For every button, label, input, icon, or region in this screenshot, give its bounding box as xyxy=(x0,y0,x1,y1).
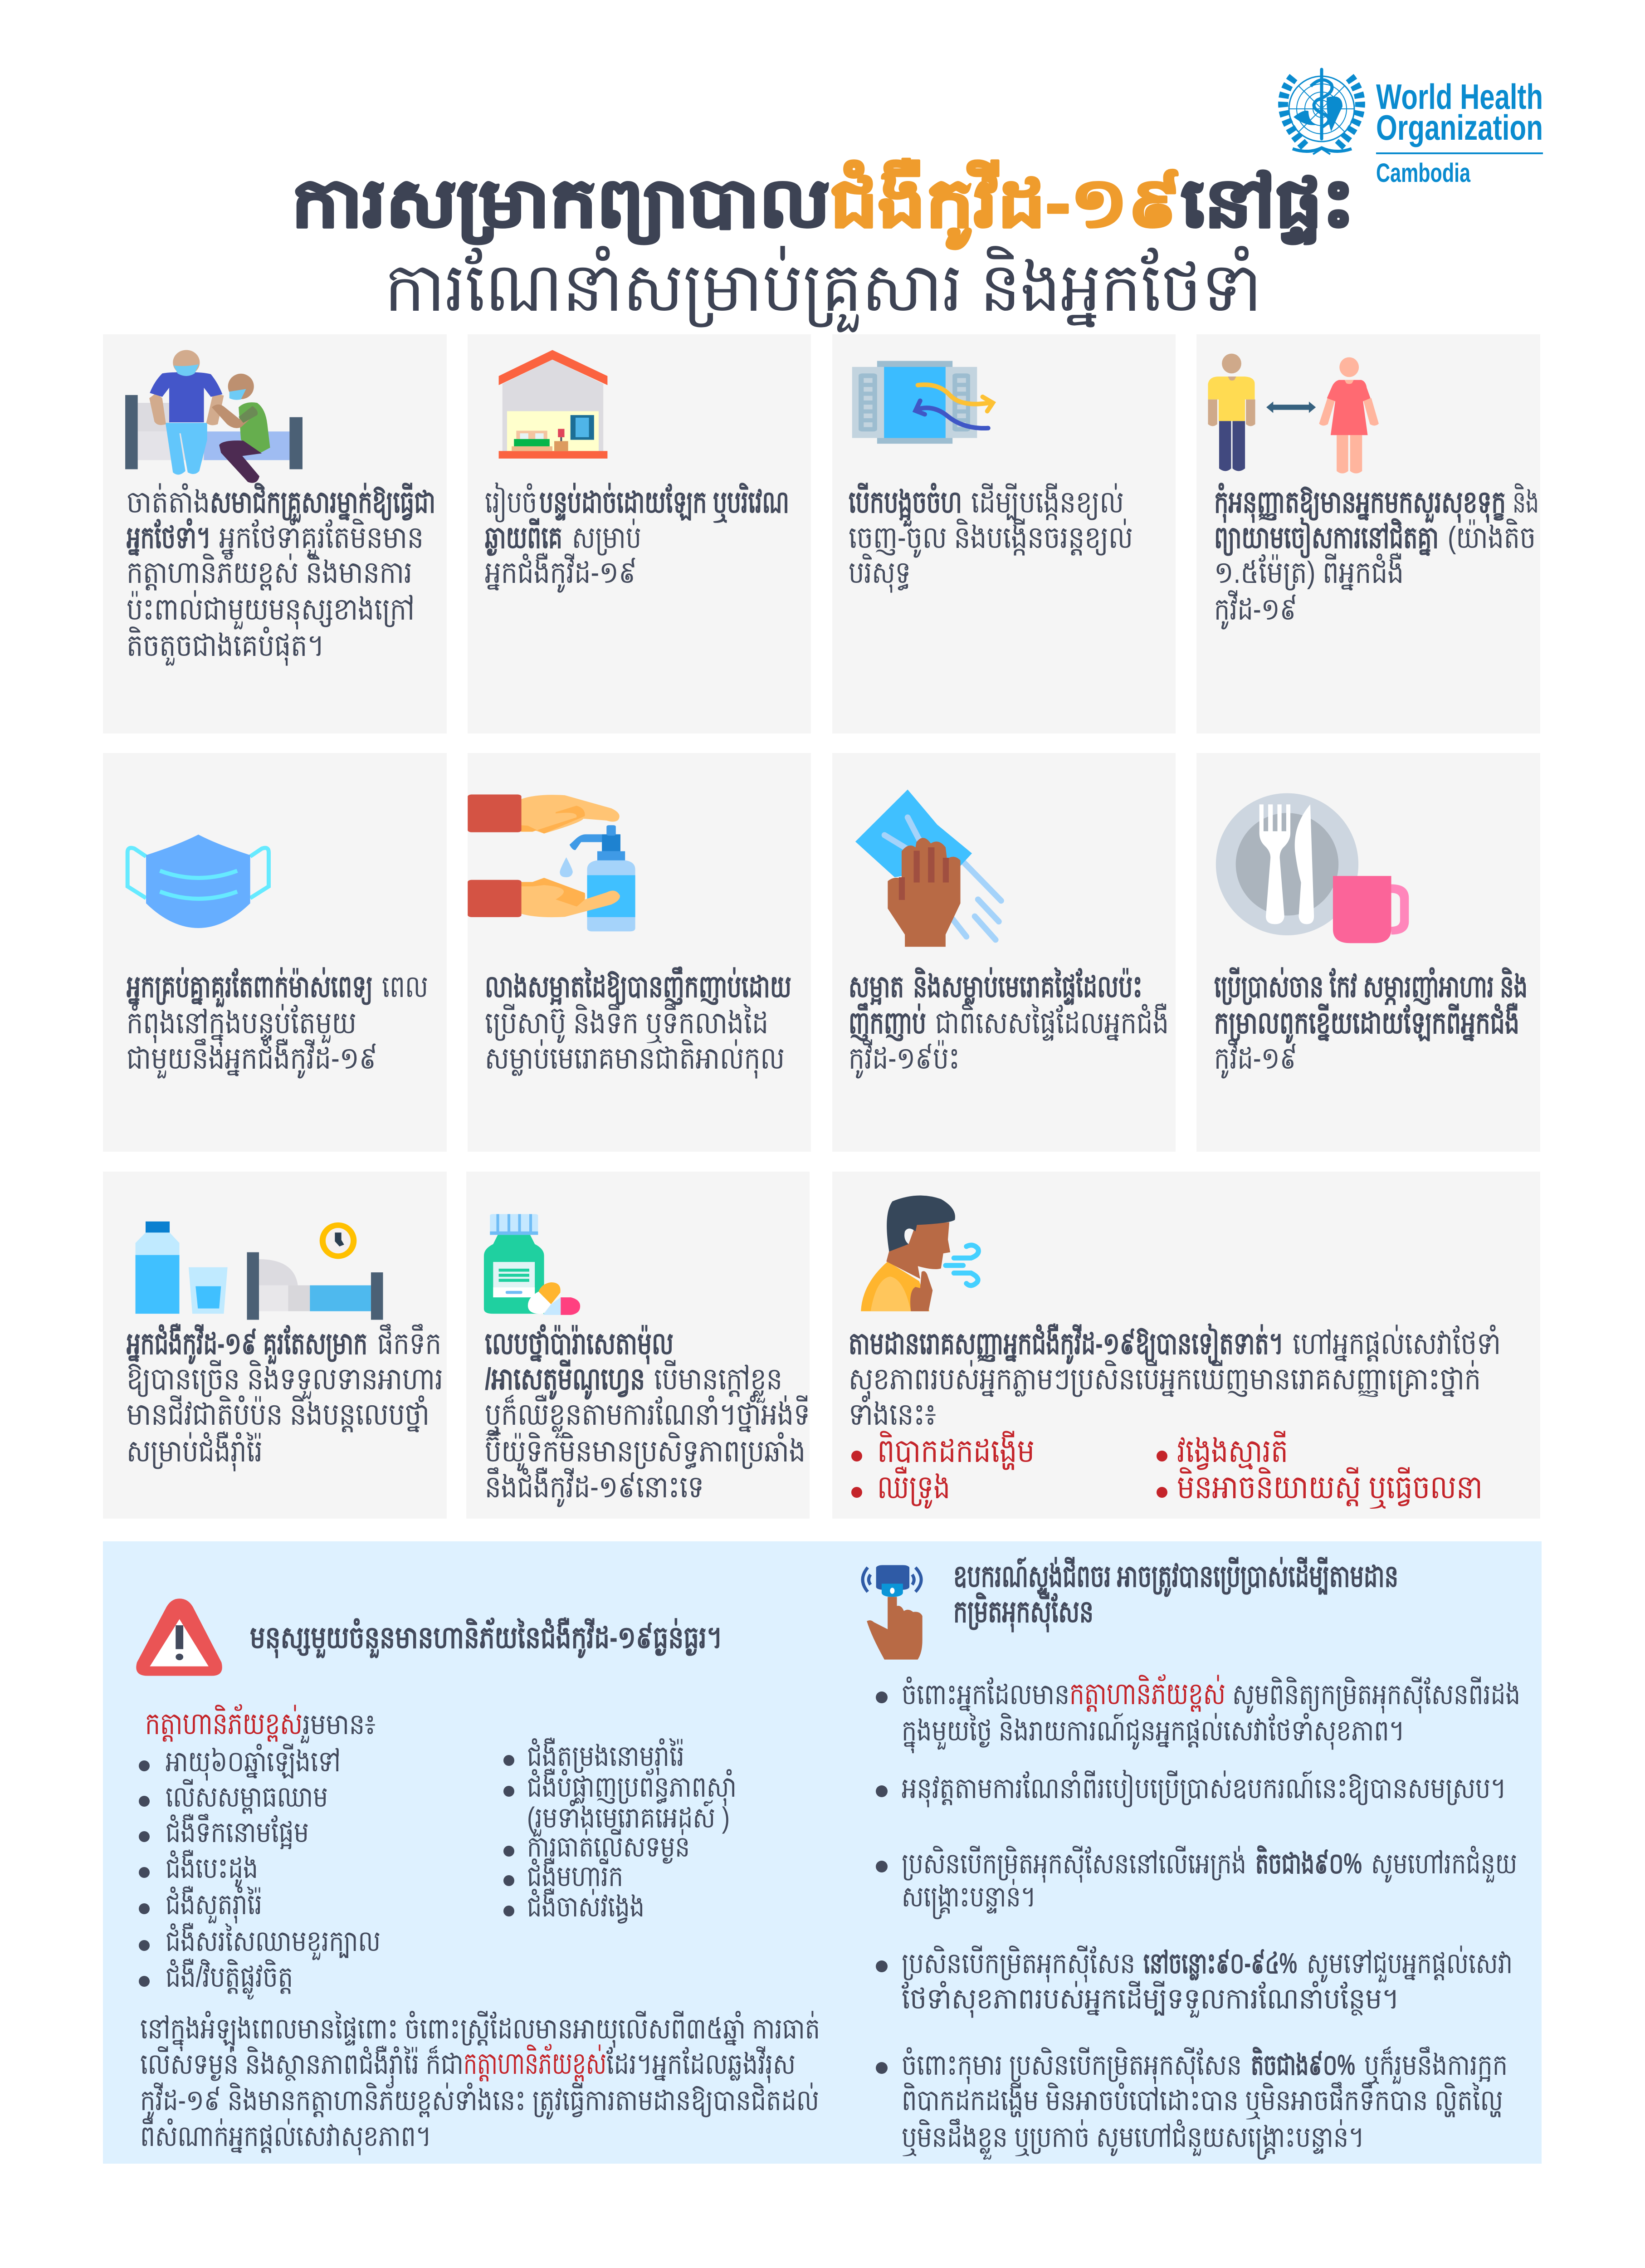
text: caregiver: ចាត់តាំង xyxy=(127,483,210,519)
text: pregnancy note: ពីសំណាក់អ្នកផ្តល់សេវាសុខភាព។ xyxy=(140,2118,431,2156)
text: distancing: និង xyxy=(1513,483,1539,519)
text: masks: កំពុងនៅក្នុងបន្ទប់តែមួយ xyxy=(127,1004,356,1047)
subtitle: ការណែនាំសម្រាប់គ្រួសារ និងអ្នកថែទាំ xyxy=(385,246,1262,332)
panel: ventilation xyxy=(832,334,1176,733)
text: distancing: ព្យាយាមចៀសការនៅជិតគ្នា xyxy=(1214,517,1439,558)
icon: warning triangle xyxy=(136,1598,222,1676)
list: risk factors right: ជំងឺបំផ្លាញប្រព័ន្ធភាពស៊ាំ xyxy=(527,1768,737,1806)
icon: plate, cutlery and mug xyxy=(1216,793,1409,943)
text: distancing: កូវីដ-១៩ xyxy=(1214,590,1297,630)
icon: person coughing xyxy=(861,1196,978,1311)
logo text: Cambodia: Cambodia xyxy=(1376,158,1471,188)
list: oximeter advice: ចំពោះកុមារ ប្រសិនបើកម្រិតអុកស៊ីសែន xyxy=(902,2047,1242,2084)
list: oximeter advice: ពិបាកដកដង្ហើម មិនអាចបំបៅដោះបាន ឬមិនអាចផឹកទឹកបាន ល្ហិតល្ហៃ xyxy=(902,2082,1503,2120)
list: oximeter advice xyxy=(876,1674,1520,2160)
text: cleaning surfaces: កូវីដ-១៩ប៉ះ xyxy=(849,1039,960,1079)
text: hand washing: សម្លាប់មេរោគមានជាតិអាល់កុល xyxy=(485,1039,785,1079)
list: risk factors left xyxy=(139,1744,381,2000)
text: cleaning surfaces: និងសម្លាប់មេរោគផ្ទៃដែលប៉ះ xyxy=(913,967,1142,1005)
text: rest and fluids: ឱ្យបានច្រើន និងទទួលទានអាហារ xyxy=(127,1360,443,1399)
list: oximeter advice: ប្រសិនបើកម្រិតអុកស៊ីសែន xyxy=(902,1945,1135,1983)
text: medicine: ឬក៏ឈឺខ្លួនតាមការណែនាំ។ថ្នាំអង់ទី xyxy=(485,1394,810,1438)
panel: utensils xyxy=(1196,753,1540,1152)
text: distancing xyxy=(1214,483,1539,630)
text: ventilation: បរិសុទ្ធ xyxy=(849,553,911,593)
list: risk factors left: ជំងឺទឹកនោមផ្អែម xyxy=(166,1813,309,1849)
text: cleaning surfaces: ញឹកញាប់ xyxy=(849,1002,926,1041)
text: separate room: រៀបចំ xyxy=(485,482,537,523)
list: oximeter advice: សូមហៅរកជំនួយ xyxy=(1371,1846,1517,1883)
list: danger signs xyxy=(851,1431,1483,1509)
icon: open window with airflow xyxy=(852,361,993,444)
list: oximeter advice: តិចជាង៩០% xyxy=(1251,2047,1355,2081)
list: danger signs: វង្វេងស្មារតី xyxy=(1177,1431,1288,1470)
text: distancing: ១.៥ម៉ែត្រ) ពីអ្នកជំងឺ xyxy=(1214,552,1404,591)
title: ជំងឺកូវីដ-១៩ xyxy=(830,159,1181,249)
text: pregnancy note: នៅក្នុងអំឡុងពេលមានផ្ទៃពោះ ចំពោះស្ត្រីដែលមានអាយុលើសពី៣៥ឆ្នាំ ការធាត់ xyxy=(140,2011,820,2052)
text: medicine xyxy=(485,1324,810,1507)
text: ventilation: ដើម្បីបង្កើនខ្យល់ xyxy=(971,483,1124,520)
list: risk factors right: ជំងឺមហារីក xyxy=(527,1857,623,1892)
text: pregnancy note: កត្តាហានិភ័យខ្ពស់ xyxy=(464,2043,606,2082)
text: ventilation: ចេញ-ចូល និងបង្កើនចរន្តខ្យល់ xyxy=(849,518,1133,558)
list: risk factors left: ជំងឺសួតរ៉ាំរ៉ៃ xyxy=(166,1886,262,1924)
text: symptoms intro xyxy=(849,1323,1501,1432)
list: danger signs: មិនអាចនិយាយស្តី ឬធ្វើចលនា xyxy=(1177,1467,1483,1509)
icon: hands and sanitizer bottle xyxy=(468,795,635,931)
text: masks xyxy=(127,967,428,1079)
list: danger signs: ឈឺទ្រូង xyxy=(877,1466,950,1509)
icon: WHO emblem xyxy=(1283,69,1360,154)
text: symptoms intro: តាមដានរោគសញ្ញាអ្នកជំងឺកូវីដ-១៩ឱ្យបានទៀតទាត់។ xyxy=(849,1323,1284,1364)
text: separate room xyxy=(485,482,789,593)
text: distancing: (យ៉ាងតិច xyxy=(1448,518,1536,555)
text: caregiver: ប៉ះពាល់ជាមួយមនុស្សខាងក្រៅ xyxy=(127,590,415,630)
list: risk factors right: (រួមទាំងមេរោគអេដស៍ ) xyxy=(527,1800,730,1837)
icon: medical mask xyxy=(127,835,268,928)
list: risk factors left: លើសសម្ពាធឈាម xyxy=(166,1779,328,1814)
text: high risk factors include: រួមមាន៖ xyxy=(301,1708,376,1744)
text: utensils: កូវីដ-១៩ xyxy=(1214,1039,1297,1079)
list: risk factors left: ជំងឺសរសៃឈាមខួរក្បាល xyxy=(166,1922,381,1960)
panel: hand washing xyxy=(468,753,811,1152)
text: separate room: សម្រាប់ xyxy=(572,518,641,556)
text: medicine: លេបថ្នាំប៉ារ៉ាសេតាម៉ុល xyxy=(485,1324,674,1364)
list: risk factors left: អាយុ៦០ឆ្នាំឡើងទៅ xyxy=(166,1744,341,1781)
list: oximeter advice: សង្គ្រោះបន្ទាន់។ xyxy=(902,1879,1036,1920)
list: oximeter advice: ឬមិនដឹងខ្លួន ឬប្រកាច់ សូមហៅជំនួយសង្គ្រោះបន្ទាន់។ xyxy=(902,2118,1364,2160)
text: caregiver: អ្នកថែទាំ។ xyxy=(127,518,211,556)
panel: distancing xyxy=(1196,334,1540,733)
text: medicine: បើមានក្តៅខ្លួន xyxy=(654,1360,782,1403)
list: oximeter advice: ថែទាំសុខភាពរបស់អ្នកដើម្បីទទួលការណែនាំបន្ថែម។ xyxy=(902,1981,1399,2018)
text: masks: ពេល xyxy=(382,969,428,1004)
text: symptoms intro: សុខភាពរបស់អ្នកភ្លាមៗប្រសិនបើអ្នកឃើញមានរោគសញ្ញាគ្រោះថ្នាក់ xyxy=(849,1360,1481,1399)
text: pregnancy note: លើសទម្ងន់ និងស្ថានភាពជំងឺរ៉ាំរ៉ៃ ក៏ជា xyxy=(140,2045,464,2083)
list: oximeter advice: នៅចន្លោះ៩០-៩៤% xyxy=(1143,1947,1297,1980)
text: separate room: បន្ទប់ដាច់ដោយឡែក ឬបរិវេណ xyxy=(539,483,789,523)
text: symptoms intro: ហៅអ្នកផ្តល់សេវាថែទាំ xyxy=(1293,1325,1501,1362)
text: cleaning surfaces: ជាពិសេសផ្ទៃដែលអ្នកជំងឺ xyxy=(935,1003,1169,1041)
logo: World Health Organization Cambodia xyxy=(1283,69,1543,188)
text: caregiver: អ្នកថែទាំគួរតែមិនមាន xyxy=(219,518,424,558)
list: oximeter advice: សូមពិនិត្យកម្រិតអុកស៊ីសែនពីរដង xyxy=(1232,1677,1520,1714)
panel: risk factors and pulse oximeter xyxy=(103,1541,1542,2164)
text: hand washing: ប្រើសាប៊ូ និងទឹក ឬទឹកលាងដៃ xyxy=(485,1003,768,1043)
list: oximeter advice: ក្នុងមួយថ្ងៃ និងរាយការណ៍ជូនអ្នកផ្តល់សេវាថែទាំសុខភាព។ xyxy=(902,1713,1405,1754)
list: oximeter advice: ឬក៏រួមនឹងការក្អក xyxy=(1364,2046,1508,2084)
text: separate room: ឆ្ងាយពីគេ xyxy=(485,518,562,556)
list: risk factors left: ជំងឺ/វិបត្តិផ្លូវចិត្ត xyxy=(166,1958,293,2000)
text: hand washing xyxy=(485,966,791,1079)
text: rest and fluids: មានជីវជាតិបំប៉ន និងបន្តលេបថ្នាំ xyxy=(127,1395,430,1432)
icon: hand wiping with cloth xyxy=(855,790,1001,947)
panel: masks xyxy=(103,753,447,1152)
list: oximeter advice: ចំពោះអ្នកដែលមាន xyxy=(902,1677,1069,1711)
text: distancing: កុំអនុញ្ញាតឱ្យមានអ្នកមកសួរសុខទុក្ខ xyxy=(1214,483,1506,523)
text: medicine: ប៊ីយ៉ូទិកមិនមានប្រសិទ្ធភាពប្រឆាំង xyxy=(485,1430,805,1471)
logo text: Organization: Organization xyxy=(1376,108,1543,147)
list: risk factors right xyxy=(503,1737,737,1924)
icon: finger pulse oximeter xyxy=(863,1565,923,1660)
icon: house with room xyxy=(499,350,607,459)
text: ventilation: បើកបង្អួចចំហ xyxy=(849,483,962,527)
panel: rest and fluids xyxy=(103,1172,447,1519)
text: pregnancy note xyxy=(140,2011,820,2156)
list: oximeter advice: កត្តាហានិភ័យខ្ពស់ xyxy=(1069,1674,1225,1712)
text: cleaning surfaces xyxy=(849,967,1169,1079)
list: risk factors right: ជំងឺតម្រងនោមរ៉ាំរ៉ៃ xyxy=(527,1737,684,1775)
panel: cleaning surfaces xyxy=(832,753,1176,1152)
logo text: World Health: World Health xyxy=(1376,77,1543,117)
panel: separate room xyxy=(468,334,811,733)
heading: pulse oximeter: កម្រិតអុកស៊ីសែន xyxy=(953,1592,1093,1633)
icon: medicine bottle and pills xyxy=(484,1214,580,1315)
text: utensils: កម្រាលពូកខ្នើយដោយឡែកពីអ្នកជំងឺ xyxy=(1214,1002,1519,1044)
heading: pulse oximeter: ឧបករណ៍ស្ទង់ជីពចរ អាចត្រូវបានប្រើប្រាស់ដើម្បីតាមដាន xyxy=(953,1557,1398,1597)
text: hand washing: លាងសម្អាតដៃឱ្យបានញឹកញាប់ដោយ xyxy=(485,966,791,1005)
text: caregiver: កត្តាហានិភ័យខ្ពស់ និងមានការ xyxy=(127,552,412,591)
text: masks: ជាមួយនឹងអ្នកជំងឺកូវីដ-១៩ xyxy=(127,1038,377,1079)
list: risk factors left: ជំងឺបេះដូង xyxy=(166,1849,258,1887)
text: rest and fluids: អ្នកជំងឺកូវីដ-១៩ គួរតែសម្រាក xyxy=(127,1323,367,1364)
text: symptoms intro: ទាំងនេះ៖ xyxy=(849,1395,936,1432)
list: oximeter advice: អនុវត្តតាមការណែនាំពីរបៀបប្រើប្រាស់ឧបករណ៍នេះឱ្យបានសមស្រប។ xyxy=(902,1769,1506,1808)
text: caregiver xyxy=(127,483,435,666)
title: ការសម្រាកព្យាបាល xyxy=(292,165,830,244)
title xyxy=(292,159,1355,249)
text: medicine: នឹងជំងឺកូវីដ-១៩នោះទេ xyxy=(485,1467,704,1507)
text: caregiver: សមាជិកគ្រួសារម្នាក់ឱ្យធ្វើជា xyxy=(210,483,435,523)
text: pregnancy note: ដែរ។អ្នកដែលឆ្លងវីរុស xyxy=(606,2046,796,2083)
text: medicine: /អាសេតូមីណូហ្វេន xyxy=(485,1359,645,1400)
panel: monitor symptoms xyxy=(832,1172,1540,1519)
text: rest and fluids: ផឹកទឹក xyxy=(377,1324,441,1361)
text: high risk factors include: កត្តាហានិភ័យខ្ពស់ xyxy=(145,1704,303,1742)
icon: two people at a distance xyxy=(1208,354,1379,474)
title: នៅផ្ទះ xyxy=(1181,165,1355,244)
text: rest and fluids xyxy=(127,1323,443,1471)
text: utensils xyxy=(1214,967,1528,1079)
text: pregnancy note: កូវីដ-១៩ និងមានកត្តាហានិភ័យខ្ពស់ទាំងនេះ ត្រូវធ្វើការតាមដានឱ្យបានជិតដល់ xyxy=(140,2082,819,2120)
heading: pulse oximeter xyxy=(953,1557,1398,1633)
list: risk factors right: ការធាត់លើសទម្ងន់ xyxy=(527,1829,690,1864)
text: caregiver: តិចតួចជាងគេបំផុត។ xyxy=(127,626,324,666)
panel: medicine xyxy=(466,1172,810,1519)
text: cleaning surfaces: សម្អាត xyxy=(849,969,904,1005)
text: ventilation xyxy=(849,483,1133,593)
icon: water, clock and bed xyxy=(136,1222,383,1320)
list: oximeter advice: តិចជាង៩០% xyxy=(1255,1845,1362,1880)
list: danger signs: ពិបាកដកដង្ហើម xyxy=(877,1431,1035,1470)
list: oximeter advice: ប្រសិនបើកម្រិតអុកស៊ីសែននៅលើអេក្រង់ xyxy=(902,1846,1246,1883)
heading: risk: មនុស្សមួយចំនួនមានហានិភ័យនៃជំងឺកូវីដ-១៩ធ្ងន់ធ្ងរ។ xyxy=(250,1617,722,1658)
list: risk factors right: ជំងឺចាស់វង្វេង xyxy=(527,1888,644,1924)
logo rule xyxy=(1376,152,1543,154)
text: rest and fluids: សម្រាប់ជំងឺរ៉ាំរ៉ៃ xyxy=(127,1431,263,1471)
list: oximeter advice: សូមទៅជួបអ្នកផ្តល់សេវា xyxy=(1307,1945,1513,1983)
panel: caregiver xyxy=(103,334,447,733)
icon: caregiver helping patient xyxy=(125,350,303,483)
text: separate room: អ្នកជំងឺកូវីដ-១៩ xyxy=(485,552,637,593)
text: masks: អ្នកគ្រប់គ្នាគួរតែពាក់ម៉ាស់ពេទ្យ xyxy=(127,967,373,1007)
